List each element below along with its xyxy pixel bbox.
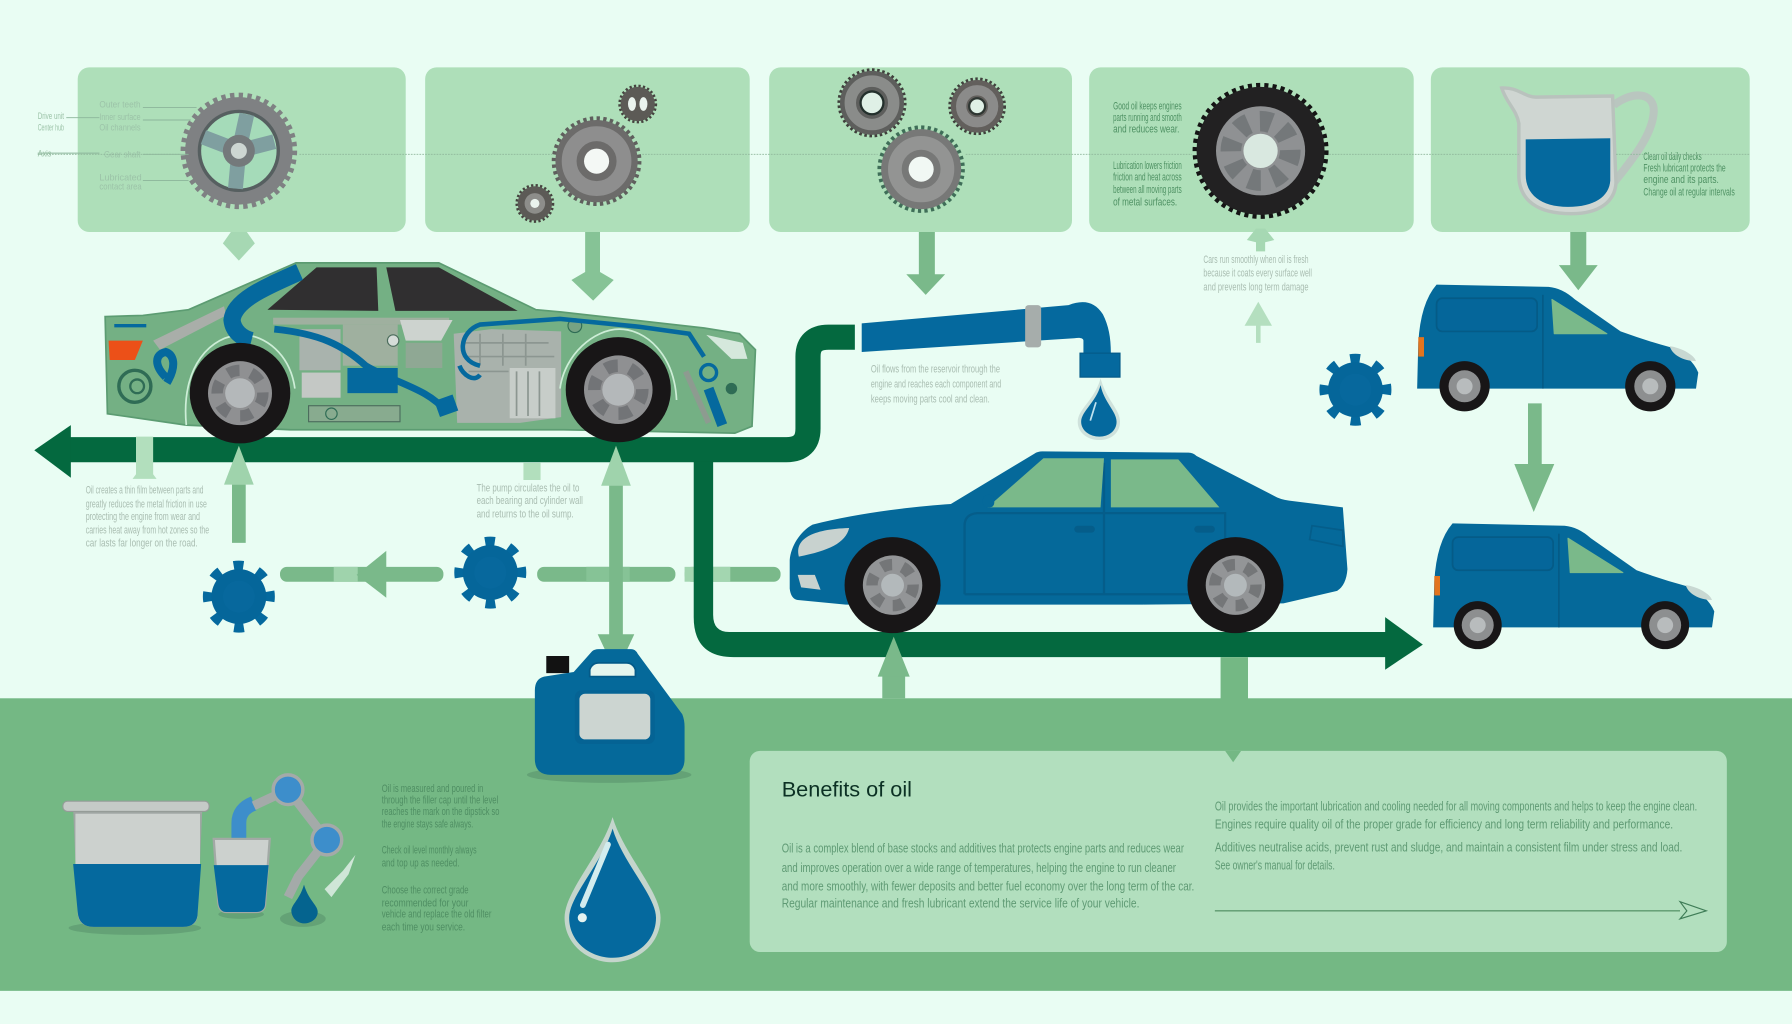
caption: center note: each bearing and cylinder wall [477, 495, 583, 507]
dotted guide line [38, 153, 1750, 155]
caption: left note: Oil creates a thin film between parts and [86, 485, 203, 497]
caption: process notes [382, 783, 499, 933]
caption: process notes: Check oil level monthly always [382, 845, 477, 857]
jug text: engine and its parts. [1643, 174, 1719, 186]
gear callout labels: Outer teeth [99, 99, 141, 109]
icon: blue gear left [208, 566, 270, 627]
arrow: panel two down [571, 232, 614, 301]
van: upper blue van [1417, 285, 1698, 411]
car engine parts [119, 306, 737, 423]
caption: process notes: reaches the mark on the dipstick so [382, 806, 499, 818]
caption: left note: car lasts far longer on the road. [86, 537, 198, 549]
caption: left note: carries heat away from hot zones so the [86, 525, 209, 537]
right paragraph: See owner's manual for details. [1215, 859, 1335, 873]
arrow: panel four up [1247, 229, 1274, 251]
panel: benefits of oil [750, 751, 1727, 952]
sedan door handles [1074, 526, 1215, 533]
lower van lights [1686, 585, 1712, 600]
right paragraph: Engines require quality oil of the proper grade for efficiency and long term reliability and performance. [1215, 818, 1673, 832]
caption: center note [477, 482, 583, 521]
car: blue sedan [790, 451, 1347, 633]
pale horizontal flow bars [280, 551, 781, 598]
stub: pale left [133, 437, 157, 479]
arrow: panel five down [1559, 232, 1598, 290]
gear callout labels: Gear shaft [104, 150, 141, 160]
tyre text: between all moving parts [1113, 184, 1182, 196]
sedan rear wheel [1187, 537, 1283, 633]
panel pointer [1225, 751, 1241, 762]
caption: process notes: recommended for your [382, 897, 469, 909]
tyre text: friction and heat across [1113, 172, 1182, 184]
caption: left note [86, 485, 209, 549]
tyre text: parts running and smooth [1113, 112, 1182, 124]
icon: falling drop [1078, 378, 1120, 440]
icon: big oil drop [565, 817, 661, 962]
van: lower blue van [1433, 523, 1714, 649]
arrow: panel three down [906, 232, 945, 295]
caption: pipe note: engine and reaches each component and [871, 378, 1001, 390]
caption: process notes: the engine stays safe always. [382, 818, 473, 830]
panel: oil jug [1431, 67, 1750, 232]
gear callout labels: Axis [38, 149, 52, 159]
car: cutaway sedan [105, 263, 755, 443]
panel: meshing gears [425, 67, 750, 232]
panel: wheel gear [38, 67, 406, 232]
caption: process notes: Choose the correct grade [382, 885, 469, 897]
left paragraph: Regular maintenance and fresh lubricant extend the service life of your vehicle. [782, 896, 1139, 910]
tyre text: of metal surfaces. [1113, 197, 1177, 209]
icon: jug [1502, 88, 1654, 214]
gear callout labels: Drive unit [38, 111, 64, 121]
caption: process notes: through the filler cap until the level [382, 794, 498, 806]
left paragraph [782, 842, 1194, 910]
caption: pipe note: Oil flows from the reservoir through the [871, 364, 1000, 376]
lower van wheels [1454, 601, 1689, 649]
gear callout labels: Oil channels [99, 122, 141, 132]
lower van window [1568, 538, 1623, 573]
caption: tyre note: because it coats every surface well [1203, 268, 1312, 280]
sedan lights [798, 528, 849, 590]
sedan mirror [983, 495, 994, 507]
arrow: between vans [1514, 403, 1554, 512]
caption: process notes: and top up as needed. [382, 857, 459, 869]
van window [1552, 299, 1607, 334]
right paragraph [1215, 799, 1697, 873]
car front wheel [566, 337, 671, 442]
gear callout labels: contact area [99, 182, 142, 192]
icon: blue gear right [1325, 359, 1386, 421]
arrow: panel one down [223, 232, 255, 261]
heading: Benefits of oil [782, 777, 912, 802]
tyre text: Good oil keeps engines [1113, 101, 1182, 113]
sedan windows [987, 458, 1219, 507]
caption: pipe note [871, 364, 1001, 405]
car wheel arches [186, 329, 677, 425]
jug text: Fresh lubricant protects the [1643, 162, 1726, 174]
car oil tank [347, 368, 398, 393]
left paragraph: and improves operation over a wide range of temperatures, helping the engine to run cleaner [782, 861, 1176, 875]
car rear wheel [190, 343, 290, 443]
icon: tyre [1195, 86, 1326, 216]
car windows [267, 267, 518, 311]
left paragraph: and more smoothly, with fewer deposits and better fuel economy over the long term of the car. [782, 879, 1194, 893]
jug text [1643, 151, 1735, 198]
jug text: Clean oil daily checks [1643, 151, 1702, 163]
car oil pipes [114, 272, 722, 425]
caption: process notes: Oil is measured and poured in [382, 783, 483, 795]
arrow: thin pointer [1215, 902, 1706, 919]
jug text: Change oil at regular intervals [1643, 186, 1735, 198]
icon: large beaker [63, 801, 209, 935]
gear callout labels: Lubricated [99, 173, 142, 183]
car head light [706, 335, 747, 359]
car tail light [109, 341, 143, 360]
icon: blue gear center [459, 542, 521, 603]
panel: tyre [1089, 67, 1414, 232]
gear callout labels: Center hub [38, 122, 64, 132]
arrow: center vertical [598, 446, 634, 651]
caption: center note: and returns to the oil sump. [477, 509, 574, 521]
tyre text [1113, 101, 1182, 209]
sedan front wheel [845, 537, 941, 633]
panel: three gears [769, 67, 1072, 232]
caption: pipe note: keeps moving parts cool and clean. [871, 393, 990, 405]
caption: tyre note: Cars run smoothly when oil is fresh [1203, 254, 1309, 266]
icon: oil jerrycan [527, 649, 691, 783]
arrow: pale up [1245, 302, 1272, 343]
icon: large gear wheel [183, 95, 294, 206]
left paragraph: Oil is a complex blend of base stocks and additives that protects engine parts and reduces wear [782, 842, 1184, 856]
sedan rear lamp outline [1310, 526, 1343, 546]
caption: process notes: vehicle and replace the old filter [382, 909, 492, 921]
caption: center note: The pump circulates the oil to [477, 482, 579, 494]
right paragraph: Additives neutralise acids, prevent rust and sludge, and maintain a consistent film under stress and load. [1215, 840, 1682, 854]
caption: left note: greatly reduces the metal friction in use [86, 498, 207, 510]
gear callout labels: Inner surface [99, 112, 141, 122]
connector: down to panel [1221, 657, 1248, 699]
caption: process notes: each time you service. [382, 921, 465, 933]
van wheels [1439, 361, 1675, 411]
van lights [1670, 346, 1696, 361]
icon: three gears [517, 86, 655, 221]
bottom green band [0, 698, 1792, 991]
caption: tyre note [1203, 254, 1312, 293]
icon: gear cluster [839, 70, 1004, 210]
tyre text: and reduces wear. [1113, 124, 1179, 136]
tyre text: Lubrication lowers friction [1113, 160, 1182, 172]
arrow: left up [224, 446, 254, 543]
stub: pale center [523, 463, 541, 480]
arrow: up to sedan [878, 637, 910, 698]
caption: left note: protecting the engine from wear and [86, 511, 200, 523]
icon: oil pipe and tap [862, 302, 1120, 377]
main dark green flow line [34, 337, 1423, 670]
caption: tyre note: and prevents long term damage [1203, 281, 1309, 293]
gear callout labels [38, 99, 197, 192]
icon: robot arm pouring [214, 775, 355, 927]
